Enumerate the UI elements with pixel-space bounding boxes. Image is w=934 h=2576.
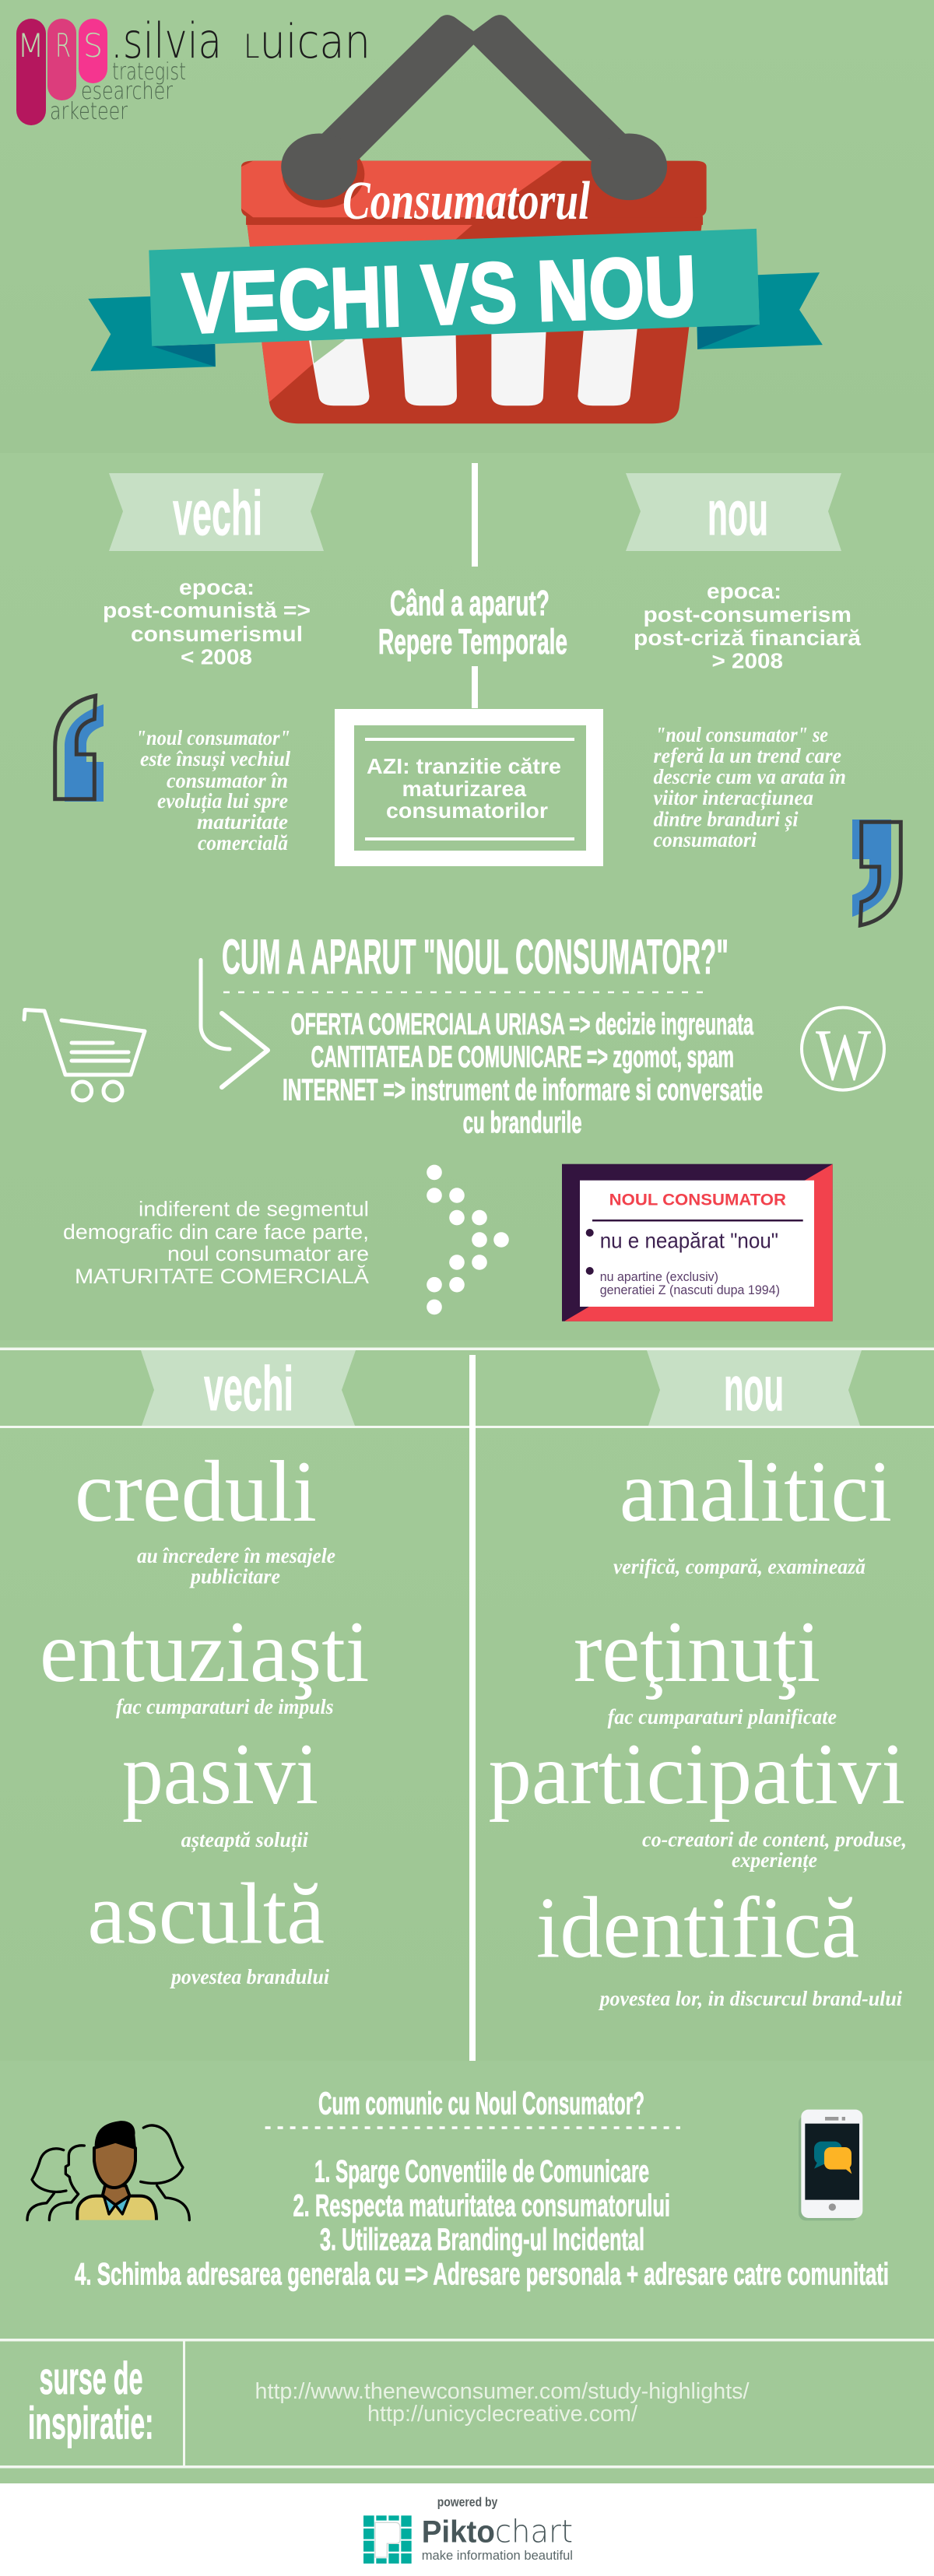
footer: piktochart: powered by — [437, 2495, 498, 2510]
text: source links — [255, 2379, 750, 2427]
footer: piktochart — [363, 2495, 573, 2564]
icon: piktochart logo — [363, 2515, 412, 2564]
wordmark: Piktochart — [422, 2515, 573, 2550]
heading: repere temporale: Când a aparut? — [390, 584, 550, 623]
text: maturitate comerciala: demografic din care face parte, — [63, 1220, 369, 1244]
arrow: curve and chevron — [201, 960, 268, 1087]
panel: sources — [0, 2339, 934, 2469]
banner — [149, 229, 760, 346]
text: maturitate comerciala: noul consumator are — [167, 1242, 369, 1265]
item: retinuti: fac cumparaturi planificate — [608, 1705, 837, 1728]
quote text: vechi: maturitate — [197, 810, 288, 834]
text: epoca vechi: < 2008 — [181, 644, 252, 669]
basket handle — [283, 141, 364, 208]
ribbon: nou — [647, 1350, 862, 1426]
basket slots — [307, 328, 369, 405]
ribbon: vechi: vechi — [173, 479, 262, 549]
card: noul consumator: nu e neapărat "nou" — [600, 1228, 778, 1252]
text: epoca vechi: post-comunistă => — [103, 598, 311, 623]
heading: repere temporale: Repere Temporale — [378, 622, 567, 662]
item: participativi: experiențe — [732, 1848, 817, 1872]
quote text: nou: consumatori — [654, 828, 757, 851]
text: epoca nou — [634, 579, 861, 672]
ribbon: vechi: vechi — [204, 1354, 293, 1424]
logo: mrs silvia luican: arketeer — [50, 98, 128, 125]
list: communication rules — [75, 2155, 889, 2291]
logo: mrs silvia luican: Luican — [244, 15, 370, 69]
callout: azi: consumatorilor — [386, 798, 548, 823]
item: pasivi: pasivi — [122, 1726, 318, 1823]
icon: opening quote — [55, 696, 104, 802]
icon: dotted arrow — [427, 1165, 509, 1314]
ribbon: vechi — [109, 473, 324, 551]
item: participativi: co-creatori de content, produse, — [642, 1828, 907, 1851]
quote text: vechi: comercială — [198, 831, 288, 855]
text: causes — [283, 1008, 763, 1139]
item: identifica — [536, 1879, 902, 2010]
item: creduli: publicitare — [189, 1565, 280, 1588]
text: source links: http://unicyclecreative.com/ — [367, 2402, 638, 2427]
item: analitici: verifică, compară, examinează — [613, 1555, 866, 1578]
item: entuziasti: fac cumparaturi de impuls — [116, 1695, 334, 1718]
icon: wordpress: W — [816, 1015, 871, 1096]
text: causes: cu brandurile — [463, 1107, 582, 1139]
quote text: vechi: evoluția lui spre — [157, 789, 288, 813]
icon: smartphone — [799, 2110, 862, 2220]
item: creduli — [75, 1444, 335, 1588]
heading: surse de inspiratie — [28, 2353, 153, 2448]
ribbon: nou: nou — [724, 1354, 784, 1424]
quote text: vechi — [135, 726, 290, 855]
title: vechi vs nou: VECHI VS NOU — [181, 238, 697, 352]
heading: cum comunic: Cum comunic cu Noul Consumator? — [318, 2086, 644, 2122]
banner tails — [88, 297, 216, 371]
text: epoca nou: post-consumerism — [643, 602, 851, 626]
quote text: vechi: consumator în — [167, 769, 288, 792]
text: epoca vechi: epoca: — [179, 575, 255, 599]
logo: mrs silvia luican: esearcher — [81, 78, 174, 105]
ribbon: vechi — [141, 1350, 356, 1426]
footer: piktochart: make information beautiful — [422, 2548, 573, 2563]
heading: surse de inspiratie: inspiratie: — [28, 2398, 153, 2448]
logo: mrs silvia luican: S — [83, 26, 103, 65]
logo: mrs silvia luican: R — [55, 26, 71, 65]
quote text: nou: referă la un trend care — [654, 744, 841, 767]
text: maturitate comerciala — [63, 1198, 369, 1288]
heading: surse de inspiratie: surse de — [39, 2353, 143, 2404]
text: maturitate comerciala: indiferent de segmentul — [139, 1198, 369, 1221]
quote text: nou: dintre branduri și — [654, 808, 799, 831]
item: participativi — [489, 1726, 907, 1872]
callout: azi — [335, 709, 603, 866]
item: analitici — [613, 1444, 892, 1578]
icon: closing quote — [852, 819, 901, 925]
list: communication rules: 3. Utilizeaza Branding-ul Incidental — [320, 2223, 644, 2257]
quote text: vechi: "noul consumator" — [135, 726, 290, 749]
icon: shopping cart — [24, 1010, 145, 1100]
text: source links: http://www.thenewconsumer.com/study-highlights/ — [255, 2379, 750, 2404]
item: entuziasti: entuziaşti — [40, 1604, 369, 1700]
quote text: nou: descrie cum va arata în — [654, 765, 846, 788]
text: epoca vechi: consumerismul — [131, 622, 303, 646]
ribbon: nou — [626, 473, 841, 551]
list: communication rules: 2. Respecta maturitatea consumatorului — [293, 2189, 670, 2223]
item: analitici: analitici — [620, 1444, 892, 1540]
quote text: nou: "noul consumator" se — [655, 723, 828, 746]
item: participativi: participativi — [489, 1726, 905, 1823]
item: asculta: ascultă — [87, 1866, 325, 1963]
text: epoca vechi — [103, 575, 311, 669]
title: consumatorul: Consumatorul — [342, 171, 590, 231]
callout: azi: AZI: tranzitie către — [367, 754, 561, 778]
item: creduli: creduli — [75, 1444, 317, 1540]
card: noul consumator: NOUL CONSUMATOR — [609, 1191, 786, 1209]
card: noul consumator: generatiei Z (nascuti dupa 1994) — [600, 1283, 780, 1297]
item: creduli: au încredere în mesajele — [137, 1544, 335, 1567]
text: epoca nou: > 2008 — [711, 649, 783, 672]
panel: when it appeared — [55, 463, 901, 925]
item: retinuti: reţinuţi — [574, 1604, 820, 1700]
item: asculta: povestea brandului — [170, 1965, 329, 1988]
text: epoca nou: post-criză financiară — [634, 626, 861, 650]
logo: mrs silvia luican: M — [17, 26, 44, 65]
ribbon: nou: nou — [708, 479, 768, 549]
item: pasivi: așteaptă soluții — [181, 1828, 308, 1852]
card: noul consumator — [562, 1164, 833, 1321]
text: epoca nou: epoca: — [707, 579, 781, 603]
item: identifica: povestea lor, in discurcul brand-ului — [599, 1987, 902, 2010]
item: identifica: identifică — [536, 1879, 859, 1976]
logo: mrs silvia luican: trategist — [112, 58, 186, 86]
quote text: nou: viitor interacțiunea — [654, 786, 813, 810]
heading: repere temporale — [378, 584, 567, 662]
icon: shopping basket with title banner — [88, 15, 823, 423]
card: noul consumator: nu apartine (exclusiv) — [600, 1269, 718, 1284]
icon: people group — [27, 2121, 189, 2220]
quote text: vechi: este însuși vechiul — [140, 747, 290, 771]
text: maturitate comerciala: MATURITATE COMERCIALĂ — [75, 1265, 369, 1288]
list: communication rules: 1. Sparge Conventiile de Comunicare — [314, 2155, 649, 2189]
logo: mrs silvia luican — [16, 12, 370, 125]
basket body — [246, 216, 703, 423]
panel: comparison vechi vs nou — [0, 1348, 934, 2061]
logo: mrs silvia luican: .silvia — [111, 12, 222, 69]
callout: azi: maturizarea — [402, 777, 526, 801]
panel: how the new consumer appeared — [24, 930, 884, 1321]
quote text: nou — [654, 723, 846, 851]
panel: how to communicate — [27, 2086, 889, 2291]
